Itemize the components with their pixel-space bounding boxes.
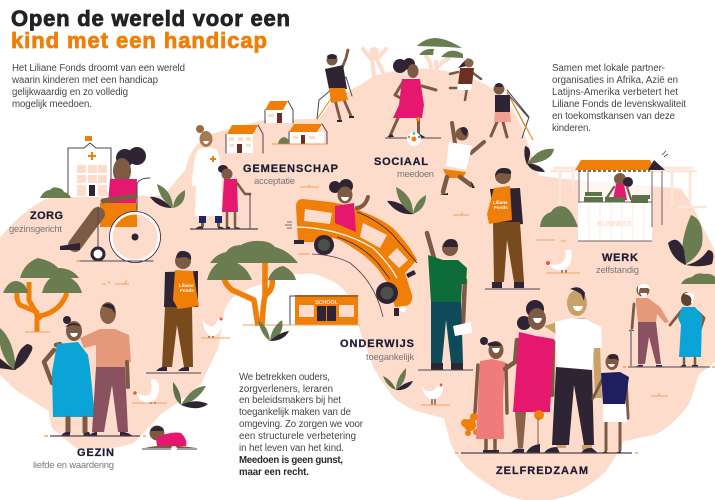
plant near onderwijs: [383, 368, 413, 390]
title: Open de wereld voor een: [11, 6, 290, 31]
left acacia tree: [3, 258, 82, 332]
zorg label: ZORG: [30, 210, 63, 222]
acacia tree orange: [207, 241, 298, 326]
bottom explanatory text: in het leven van het kind.: [239, 443, 344, 454]
man in white shirt: [544, 287, 602, 453]
market stall with background building: BUSINESS: [597, 219, 632, 228]
running girl: [450, 58, 481, 100]
zelfredzaam label: ZELFREDZAAM: [496, 465, 588, 477]
gezin label: GEZIN: [77, 447, 114, 459]
ground marks: [102, 185, 668, 396]
bush right edge: [681, 273, 715, 284]
family: gezin: [44, 302, 146, 436]
wheelchair child: [60, 147, 160, 262]
man with backpack center: [485, 168, 540, 289]
intro text: [11, 63, 185, 110]
woman in pink dress: [505, 300, 554, 453]
plant by gezin: [173, 382, 208, 408]
man with backpack center: Liliane: [493, 200, 508, 205]
girl in coral dress: [475, 337, 507, 453]
man in salmon shirt: [80, 302, 133, 436]
werk label: WERK: [602, 252, 638, 264]
man in green with paper: [418, 233, 473, 370]
family: zelfredzaam: [455, 287, 638, 453]
bottom explanatory text: omgeving. Zo zorgen we voor: [239, 419, 364, 430]
village houses: [226, 101, 328, 153]
right intro text: Liliane Fonds de levenskwaliteit: [552, 99, 686, 110]
onderwijs label: toegankelijk: [366, 351, 414, 362]
right intro text: Samen met lokale partner-: [552, 63, 665, 74]
older couple: [623, 284, 715, 367]
right intro text: en toekomstkansen van deze: [552, 111, 675, 122]
sociaal label: SOCIAAL: [374, 156, 428, 168]
sociaal label: meedoen: [397, 168, 434, 179]
crawling baby: [142, 426, 197, 452]
intro text: gelijkwaardig en zo volledig: [12, 87, 128, 98]
school: [243, 295, 360, 325]
bottom explanatory text: zorgverleners, leraren: [239, 384, 333, 395]
plant by wheelchair: [150, 184, 185, 208]
plant by sociaal: [387, 187, 426, 214]
man with backpack center: Fonds: [494, 205, 508, 210]
bus: [285, 179, 417, 317]
gezin label: [33, 447, 114, 470]
title: [11, 6, 290, 53]
onderwijs label: ONDERWIJS: [340, 338, 414, 350]
bottom explanatory text: en beleidsmakers bij het: [239, 395, 341, 406]
market stall with background building: [536, 151, 707, 241]
gemeenschap label: [243, 163, 338, 186]
right intro text: kinderen.: [552, 123, 591, 134]
bottom explanatory text: maar een recht.: [239, 467, 309, 478]
girl in bus: [329, 179, 368, 232]
bottom explanatory text: [239, 372, 364, 478]
chicken by man: [201, 318, 230, 338]
bottom explanatory text: een structurele verbetering: [239, 431, 356, 442]
child waving with walker: [317, 50, 354, 122]
boy in navy shirt: [593, 354, 629, 453]
right intro text: [552, 63, 686, 134]
werk label: [596, 252, 639, 275]
hospital: [40, 136, 111, 198]
chicken left: [132, 379, 167, 404]
teddy bear: [461, 413, 479, 436]
bottom explanatory text: toegankelijk maken van de: [239, 407, 351, 418]
gemeenschap label: acceptatie: [254, 175, 295, 186]
girl with cane: [190, 165, 258, 229]
sociaal label: [374, 156, 434, 179]
onderwijs label: [340, 338, 414, 362]
werk label: zelfstandig: [596, 264, 639, 275]
gezin label: liefde en waardering: [33, 459, 114, 470]
peach silhouette figure: [363, 47, 386, 76]
man with backpack left: Liliane: [179, 283, 194, 288]
acacia tree on hill: [417, 38, 463, 70]
intro text: Het Liliane Fonds droomt van een wereld: [12, 63, 185, 74]
doctor: [192, 125, 225, 229]
boy with walker on hill: [491, 83, 533, 140]
plant by school: [258, 320, 289, 341]
chicken near old couple: [546, 250, 580, 273]
woman in blue dress: [44, 316, 95, 436]
bottom explanatory text: We betrekken ouders,: [239, 372, 330, 383]
man with backpack left: [146, 251, 201, 373]
school: SCHOOL: [315, 300, 339, 306]
bottom explanatory text: Meedoen is geen gunst,: [239, 455, 343, 466]
man with backpack left: Fonds: [180, 288, 194, 293]
right intro text: Latijns-Amerika verbetert het: [552, 87, 678, 98]
title: kind met een handicap: [11, 28, 267, 53]
chicken near onderwijs: [421, 384, 450, 405]
intro text: waarin kinderen met een handicap: [11, 75, 158, 86]
girl in pink with soccer ball: [385, 58, 441, 146]
gemeenschap label: GEMEENSCHAP: [243, 163, 338, 175]
boy running: [439, 123, 484, 195]
zorg label: [9, 210, 63, 234]
right intro text: organisaties in Afrika, Azië en: [552, 75, 678, 86]
plant far left: [0, 328, 32, 370]
plant right edge: [668, 215, 713, 266]
plant upper right: [524, 146, 554, 172]
zorg label: gezinsgericht: [9, 223, 62, 234]
intro text: mogelijk meedoen.: [12, 99, 92, 110]
